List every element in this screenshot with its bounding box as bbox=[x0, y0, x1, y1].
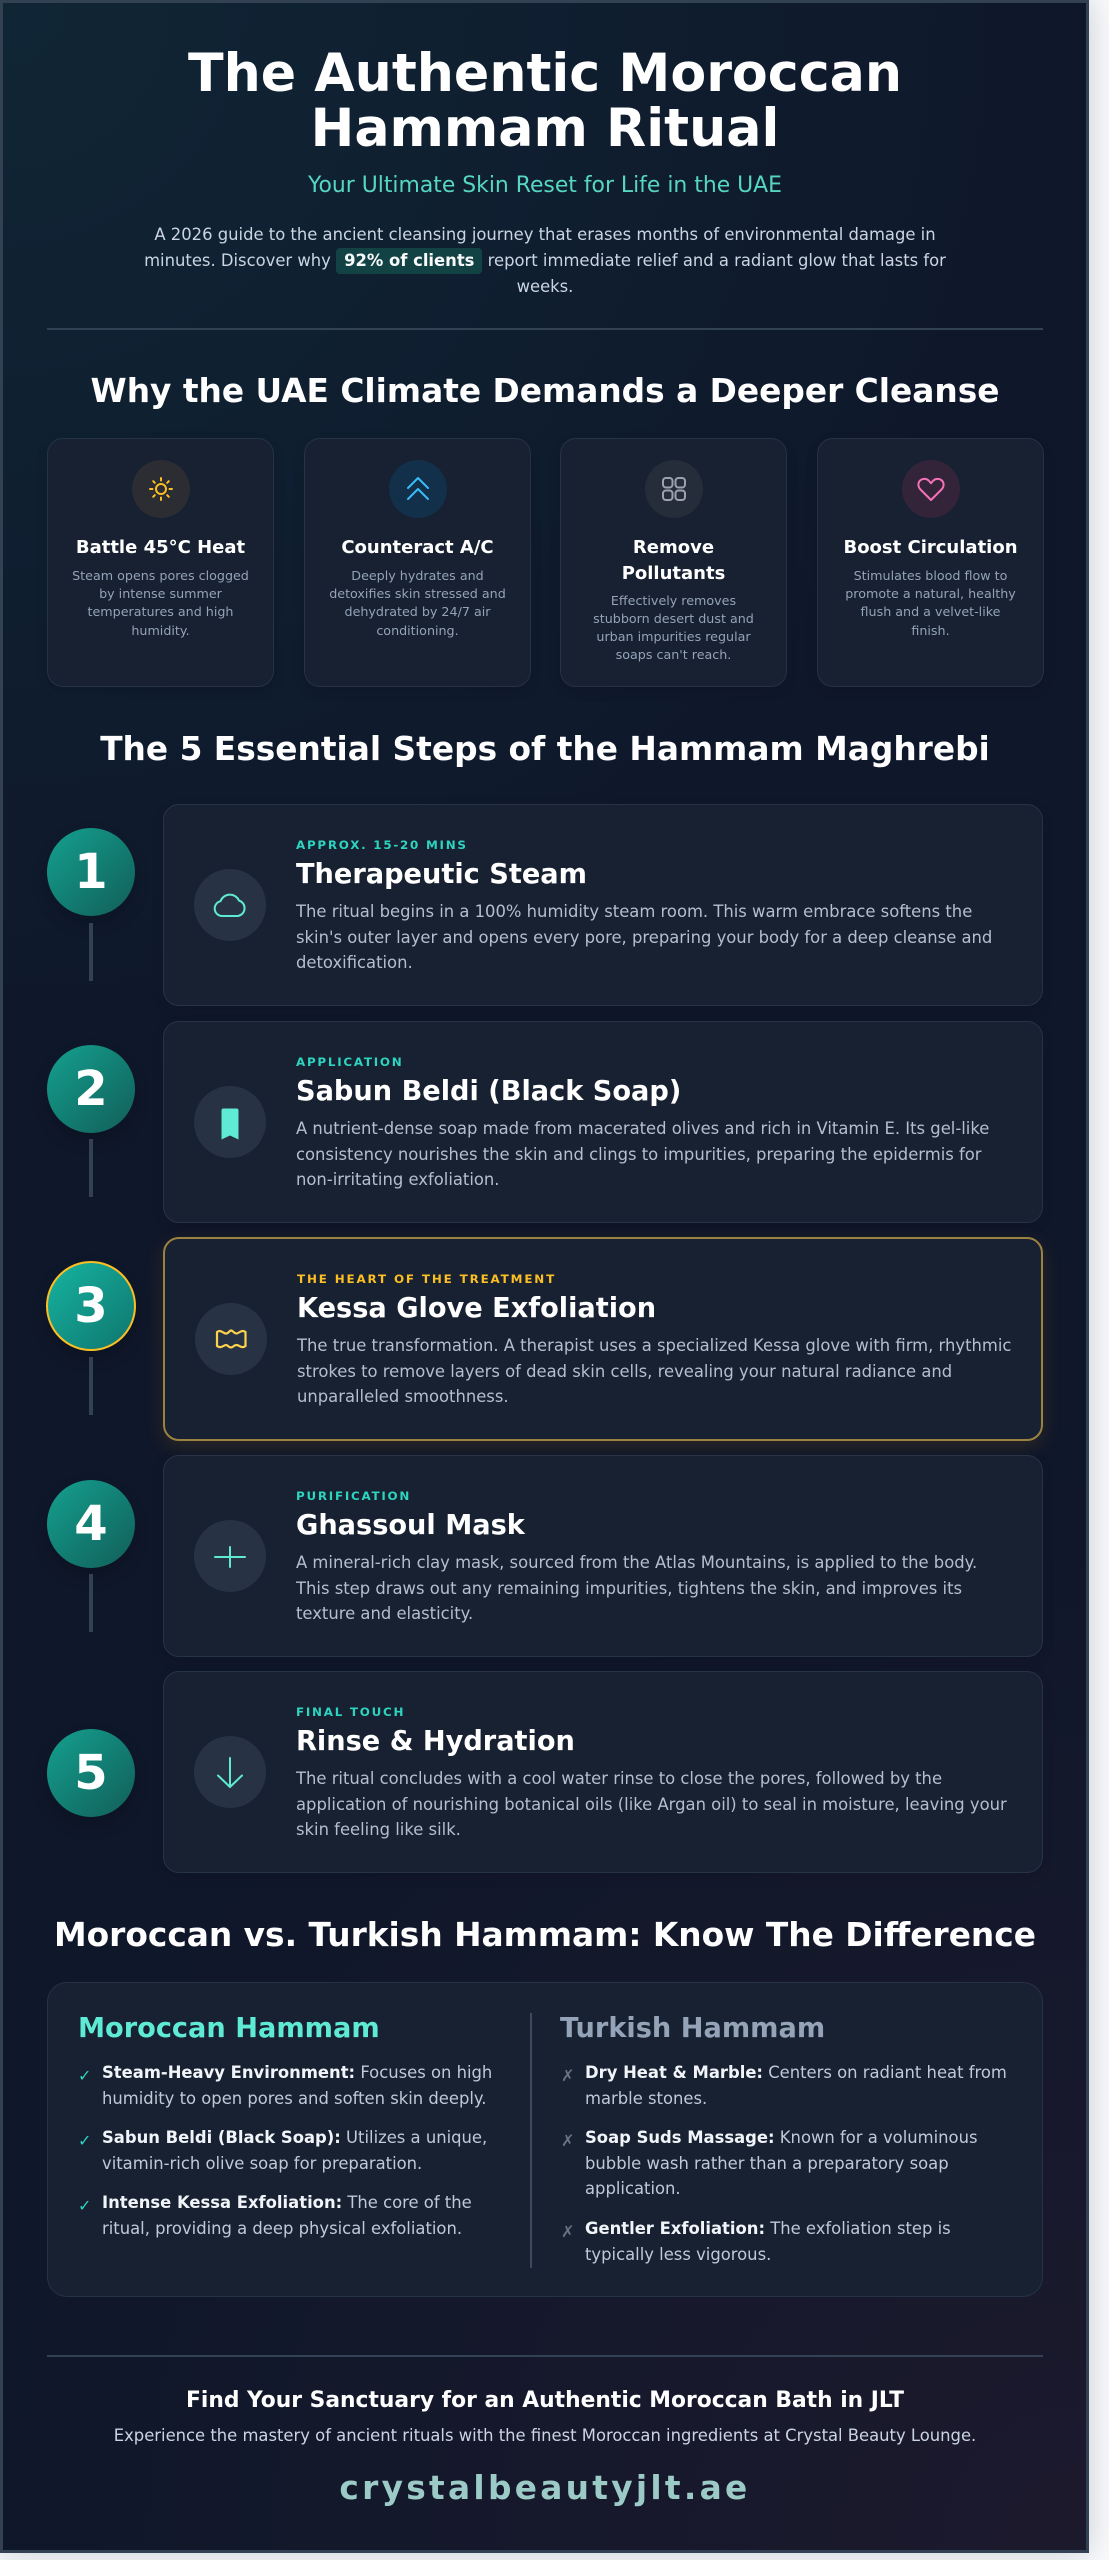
step title: Ghassoul Mask bbox=[296, 1510, 525, 1541]
card heading: Battle 45°C Heat bbox=[76, 537, 245, 558]
icon: heart bbox=[902, 460, 960, 518]
footer website: crystalbeautyjlt.ae bbox=[339, 2469, 751, 2507]
card heading: Counteract A/C bbox=[341, 537, 494, 558]
card heading: Boost Circulation bbox=[843, 537, 1018, 558]
subtitle: Your Ultimate Skin Reset for Life in the UAE bbox=[308, 173, 782, 198]
step label: THE HEART OF THE TREATMENT bbox=[297, 1272, 556, 1286]
step 1 card bbox=[163, 804, 1043, 1006]
Turkish heading: Turkish Hammam bbox=[560, 2012, 825, 2044]
item: Soap Suds Massage: Known for a voluminous bubble wash rather than a preparatory soap application. bbox=[585, 2128, 978, 2198]
Moroccan list: ✓ bbox=[78, 2196, 91, 2215]
footer text: Experience the mastery of ancient rituals with the finest Moroccan ingredients at Crystal Beauty Lounge. bbox=[114, 2426, 976, 2445]
step text: The true transformation. A therapist uses a specialized Kessa glove with firm, rhythmic strokes to remove layers of dead skin cells, revealing your natural radiance and unparalleled smoothness. bbox=[297, 1336, 1011, 1406]
step 5 card bbox=[163, 1671, 1043, 1873]
icon: arrow down bbox=[194, 1736, 266, 1808]
step 2 card bbox=[163, 1021, 1043, 1223]
step text: The ritual begins in a 100% humidity steam room. This warm embrace softens the skin's outer layer and opens every pore, preparing your body for a deep cleanse and detoxification. bbox=[296, 902, 992, 972]
card text: Steam opens pores clogged by intense summer temperatures and high humidity. bbox=[72, 568, 249, 638]
step number 1: 1 bbox=[74, 844, 108, 900]
heading: comparison: Moroccan vs. Turkish Hammam: Know The Difference bbox=[54, 1916, 1036, 1954]
step number 2 bbox=[47, 1045, 135, 1133]
title: The Authentic Moroccan bbox=[188, 44, 902, 104]
intro text: A 2026 guide to the ancient cleansing journey that erases months of environmental damage in minutes. Discover why report immediate relief and a radiant glow that lasts for weeks. bbox=[144, 225, 946, 296]
card: battle heat bbox=[47, 438, 274, 687]
Moroccan list: ✓ bbox=[78, 2066, 91, 2085]
step number 2: 2 bbox=[74, 1061, 108, 1117]
step number 4 bbox=[47, 1480, 135, 1568]
Moroccan list: ✓ bbox=[78, 2131, 91, 2150]
Turkish list: ✗ bbox=[561, 2066, 574, 2085]
icon: plus bbox=[194, 1520, 266, 1592]
Turkish list: ✗ bbox=[561, 2131, 574, 2150]
Moroccan list bbox=[78, 2063, 492, 2238]
card text: Deeply hydrates and detoxifies skin stressed and dehydrated by 24/7 air conditioning. bbox=[329, 568, 506, 638]
card: counteract A/C bbox=[304, 438, 531, 687]
step 3 card bbox=[163, 1237, 1043, 1441]
Moroccan heading: Moroccan Hammam bbox=[78, 2012, 380, 2044]
card text: Effectively removes stubborn desert dust and urban impurities regular soaps can't reach. bbox=[593, 592, 754, 662]
step number 3: 3 bbox=[74, 1278, 108, 1334]
item: Gentler Exfoliation: The exfoliation step is typically less vigorous. bbox=[585, 2219, 951, 2264]
item: Dry Heat & Marble: Centers on radiant heat from marble stones. bbox=[585, 2063, 1007, 2108]
card: remove pollutants bbox=[560, 438, 787, 687]
item: Intense Kessa Exfoliation: The core of the ritual, providing a deep physical exfoliation. bbox=[102, 2193, 472, 2238]
intro text: 92% of clients bbox=[344, 251, 474, 270]
heading: why the UAE climate: Why the UAE Climate Demands a Deeper Cleanse bbox=[91, 372, 999, 410]
Turkish list bbox=[561, 2063, 1007, 2264]
icon: double chevron bbox=[389, 460, 447, 518]
step number 3 bbox=[46, 1261, 136, 1351]
step number 1 bbox=[47, 828, 135, 916]
icon: glove bbox=[195, 1303, 267, 1375]
step label: PURIFICATION bbox=[296, 1488, 411, 1502]
card text: Stimulates blood flow to promote a natural, healthy flush and a velvet-like finish. bbox=[845, 568, 1016, 638]
step label: APPLICATION bbox=[296, 1054, 403, 1068]
card heading: Remove Pollutants bbox=[622, 537, 725, 584]
step 4 card bbox=[163, 1455, 1043, 1657]
title bbox=[188, 44, 902, 159]
step label: FINAL TOUCH bbox=[296, 1704, 405, 1718]
step title: Sabun Beldi (Black Soap) bbox=[296, 1076, 681, 1107]
Turkish list: ✗ bbox=[561, 2222, 574, 2241]
step title: Kessa Glove Exfoliation bbox=[297, 1293, 656, 1324]
icon: sun bbox=[132, 460, 190, 518]
item: Steam-Heavy Environment: Focuses on high humidity to open pores and soften skin deeply. bbox=[102, 2063, 492, 2108]
heading: five steps: The 5 Essential Steps of the Hammam Maghrebi bbox=[100, 730, 990, 768]
step label: APPROX. 15-20 MINS bbox=[296, 838, 468, 852]
item: Sabun Beldi (Black Soap): Utilizes a unique, vitamin-rich olive soap for preparation. bbox=[102, 2128, 487, 2173]
title: Hammam Ritual bbox=[311, 99, 779, 159]
step number 4: 4 bbox=[74, 1496, 108, 1552]
panel: comparison bbox=[47, 1982, 1043, 2297]
step text: A mineral-rich clay mask, sourced from the Atlas Mountains, is applied to the body. This step draws out any remaining impurities, tightens the skin, and improves its texture and elasticity. bbox=[296, 1553, 977, 1623]
icon: cloud bbox=[194, 869, 266, 941]
card: boost circulation bbox=[817, 438, 1044, 687]
step title: Rinse & Hydration bbox=[296, 1726, 575, 1757]
footer heading: Find Your Sanctuary for an Authentic Moroccan Bath in JLT bbox=[186, 2388, 904, 2413]
icon: bookmark bbox=[194, 1086, 266, 1158]
step number 5 bbox=[47, 1729, 135, 1817]
icon: grid bbox=[645, 460, 703, 518]
step text: The ritual concludes with a cool water rinse to close the pores, followed by the application of nourishing botanical oils (like Argan oil) to seal in moisture, leaving your skin feeling like silk. bbox=[296, 1769, 1007, 1839]
step text: A nutrient-dense soap made from macerated olives and rich in Vitamin E. Its gel-like consistency nourishes the skin and clings to impurities, preparing the epidermis for non-irritating exfoliation. bbox=[296, 1119, 989, 1189]
step title: Therapeutic Steam bbox=[296, 859, 587, 890]
step number 5: 5 bbox=[74, 1745, 108, 1801]
